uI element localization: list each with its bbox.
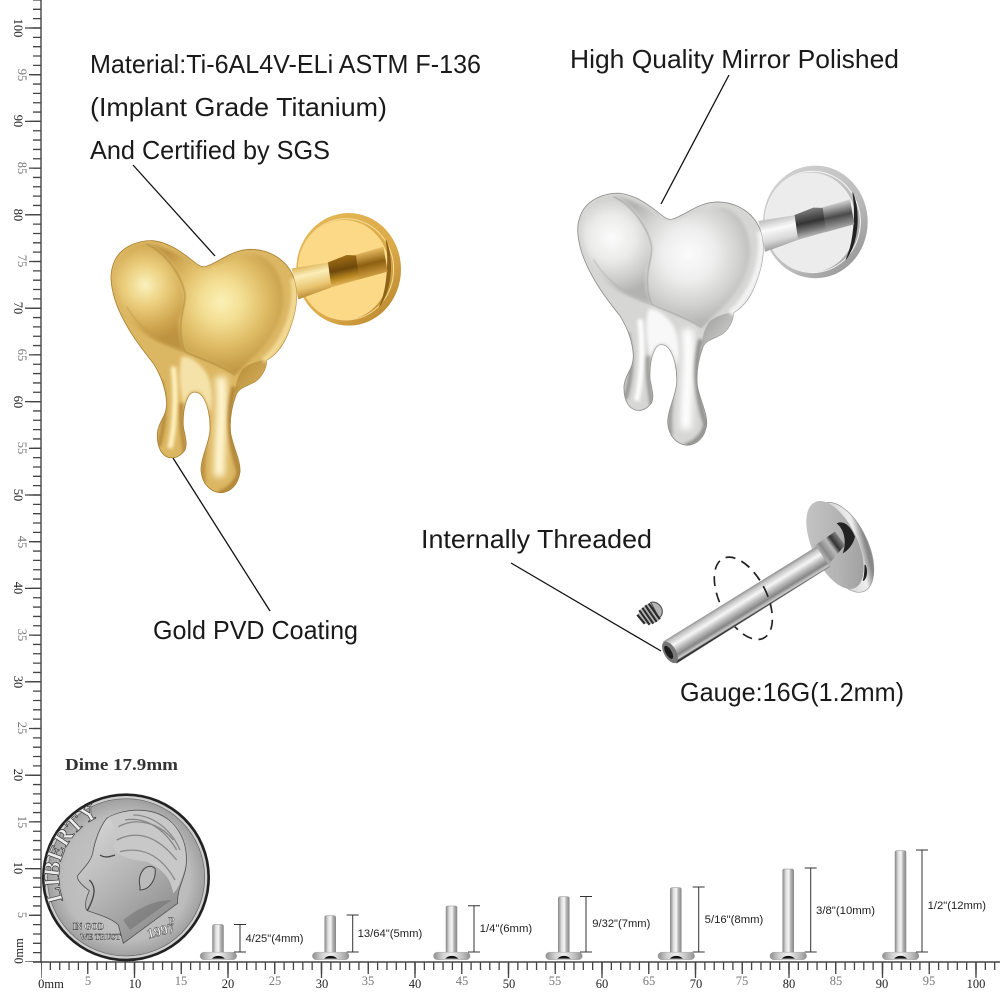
horizontal scale numbers: 15 [175, 974, 187, 988]
flat disc head [794, 493, 886, 601]
horizontal scale numbers: 95 [923, 974, 935, 988]
vertical scale numbers: 10 [11, 862, 25, 874]
vertical scale numbers: 50 [11, 489, 25, 501]
vertical scale numbers: 40 [11, 582, 25, 594]
horizontal scale numbers: 40 [409, 977, 421, 991]
length sample: 4mm [200, 924, 304, 960]
text: material specification [90, 49, 481, 165]
horizontal minor ticks [41, 962, 1000, 970]
horizontal scale numbers: 80 [783, 977, 795, 991]
gold dripping heart labret [111, 213, 401, 493]
length sample: 7mm: 9/32"(7mm) [592, 918, 650, 930]
vertical scale numbers: 25 [15, 722, 29, 734]
vertical scale numbers [11, 19, 29, 964]
coin rim [42, 793, 210, 961]
vertical scale numbers: 80 [11, 209, 25, 221]
vertical scale numbers: 45 [15, 536, 29, 548]
dime coin [42, 793, 210, 962]
vertical scale numbers: 15 [15, 816, 29, 828]
silver heart body [578, 193, 763, 446]
silver flat back disc [763, 166, 868, 278]
text: gold PVD coating: Gold PVD Coating [153, 615, 358, 645]
vertical scale numbers: 5 [15, 912, 29, 918]
Roosevelt portrait [77, 810, 186, 943]
vertical scale numbers: 0mm [12, 938, 26, 964]
vertical 5mm ticks [29, 0, 41, 962]
coin motto, mint mark and date: IN GOD [73, 921, 104, 931]
horizontal scale numbers: 0mm [38, 977, 64, 991]
horizontal scale numbers: 25 [269, 974, 281, 988]
length sample: 5mm [312, 915, 422, 960]
horizontal axis line [33, 961, 1000, 963]
vertical 10mm ticks [25, 0, 41, 962]
horizontal scale numbers: 30 [316, 977, 328, 991]
leader line: internal thread [511, 563, 661, 651]
length sample: 10mm: 3/8"(10mm) [816, 905, 875, 917]
horizontal scale numbers: 90 [876, 977, 888, 991]
leader line: mirror polished [661, 75, 729, 204]
vertical scale numbers: 60 [11, 396, 25, 408]
vertical scale numbers: 65 [15, 349, 29, 361]
horizontal scale numbers [38, 974, 985, 991]
dashed ellipse front arc [736, 558, 772, 606]
leader line: gold coating [173, 458, 270, 611]
vertical scale numbers: 55 [15, 442, 29, 454]
horizontal scale numbers: 60 [596, 977, 608, 991]
text: internally threaded: Internally Threaded [421, 524, 652, 554]
vertical minor ticks [33, 0, 41, 962]
text: material specification: (Implant Grade Titanium) [90, 92, 387, 122]
silver dripping heart labret [578, 166, 868, 446]
silver post [758, 199, 854, 252]
length sample: 7mm [546, 896, 650, 960]
vertical scale numbers: 100 [11, 19, 25, 37]
LIBERTY lettering: LIBERTY [44, 803, 96, 904]
horizontal scale numbers: 10 [129, 977, 141, 991]
coin motto, mint mark and date: P [168, 917, 174, 928]
vertical scale numbers: 90 [11, 115, 25, 127]
vertical axis line [40, 0, 42, 963]
vertical scale numbers: 85 [15, 162, 29, 174]
horizontal scale numbers: 55 [549, 974, 561, 988]
internally threaded post with screw [636, 501, 874, 664]
length sample: 10mm [770, 868, 875, 960]
text: material specification: Material:Ti-6AL4V-ELi ASTM F-136 [90, 49, 481, 79]
horizontal scale numbers: 70 [690, 977, 702, 991]
horizontal scale numbers: 85 [830, 974, 842, 988]
horizontal scale numbers: 100 [967, 977, 985, 991]
horizontal scale numbers: 65 [643, 974, 655, 988]
vertical scale numbers: 95 [15, 69, 29, 81]
length sample: 12mm [882, 850, 986, 960]
horizontal scale numbers: 20 [222, 977, 234, 991]
leader line: material to gold heart [133, 165, 215, 256]
horizontal 5mm ticks [41, 962, 1000, 974]
text: gauge: Gauge:16G(1.2mm) [680, 677, 904, 707]
vertical scale numbers: 70 [11, 302, 25, 314]
coin motto, mint mark and date [73, 917, 176, 943]
shaft [659, 547, 830, 666]
coin motto, mint mark and date: 1997 [146, 921, 176, 943]
dashed ellipse behind shaft [702, 548, 784, 649]
horizontal scale numbers: 50 [503, 977, 515, 991]
gold flat back disc [296, 213, 401, 326]
gold post [292, 247, 388, 299]
vertical scale numbers: 30 [11, 676, 25, 688]
text: material specification: And Certified by SGS [90, 135, 330, 165]
length sample: 6mm [434, 906, 532, 960]
length sample: 4mm: 4/25"(4mm) [246, 933, 304, 945]
length sample: 5mm: 13/64"(5mm) [358, 928, 422, 940]
length sample: 6mm: 1/4"(6mm) [480, 923, 532, 935]
text: mirror polished: High Quality Mirror Polished [570, 44, 899, 74]
vertical scale numbers: 35 [15, 629, 29, 641]
length sample: 12mm: 1/2"(12mm) [928, 900, 986, 912]
length sample: 8mm: 5/16"(8mm) [705, 914, 763, 926]
horizontal scale numbers: 35 [362, 974, 374, 988]
horizontal 10mm ticks [41, 962, 1000, 978]
horizontal scale numbers: 5 [85, 974, 91, 988]
coin motto, mint mark and date: WE TRUST [80, 931, 121, 941]
length sample: 8mm [658, 887, 763, 960]
horizontal scale numbers: 75 [736, 974, 748, 988]
gold heart body [111, 241, 297, 493]
horizontal scale numbers: 45 [456, 974, 468, 988]
vertical scale numbers: 20 [11, 769, 25, 781]
small threaded screw [635, 599, 666, 628]
vertical scale numbers: 75 [15, 255, 29, 267]
label: dime size: Dime 17.9mm [65, 755, 178, 774]
